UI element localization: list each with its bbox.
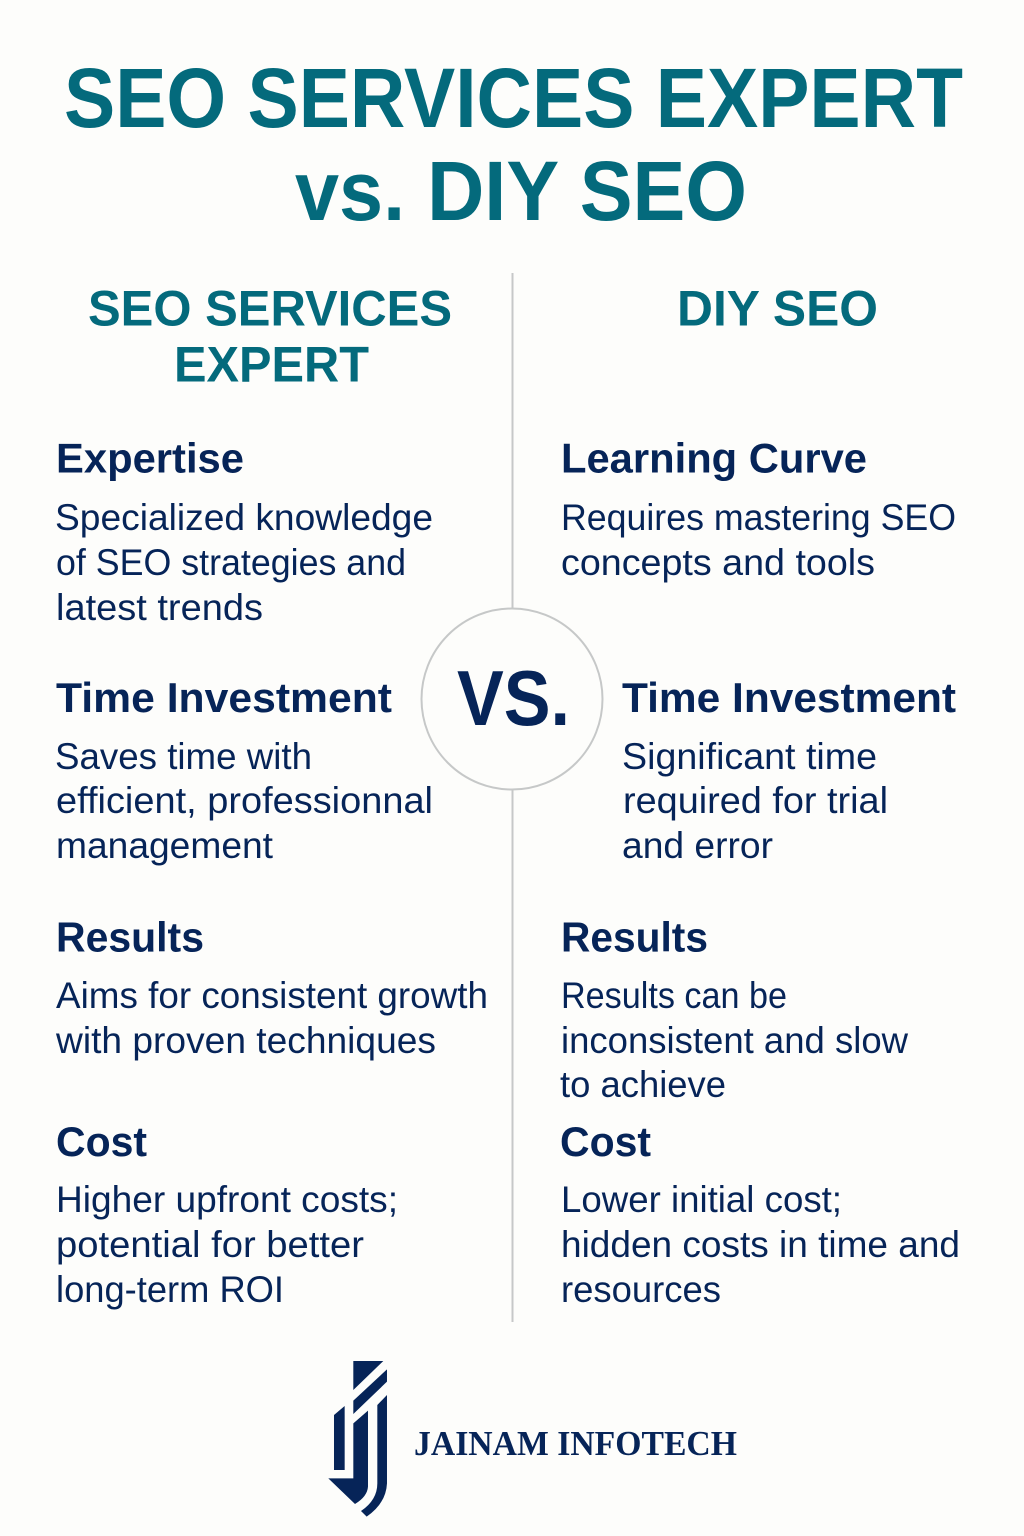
- panel: expert expertise: Specialized knowledge: [55, 497, 433, 538]
- panel: expert cost: potential for better: [56, 1224, 364, 1265]
- icon: JJ monogram: [328, 1361, 387, 1517]
- column heading: SEO services expert: [88, 280, 452, 392]
- panel: DIY results: inconsistent and slow: [561, 1020, 908, 1061]
- column heading: DIY SEO: DIY SEO: [677, 280, 878, 336]
- panel: expert cost: Cost: [56, 1118, 147, 1165]
- title: SEO SERVICES EXPERT: [64, 51, 963, 145]
- panel: expert cost: [56, 1118, 398, 1310]
- center divider line: [512, 273, 514, 1322]
- panel: expert expertise: latest trends: [56, 587, 263, 628]
- panel: expert results: Results: [56, 914, 204, 960]
- panel: expert cost: Higher upfront costs;: [56, 1179, 398, 1220]
- panel: DIY learning curve: [561, 434, 956, 583]
- panel: DIY time investment: Significant time: [622, 736, 877, 777]
- panel: expert expertise: Expertise: [56, 434, 244, 482]
- panel: DIY learning curve: Requires mastering SEO: [561, 497, 956, 538]
- column heading: SEO services expert: EXPERT: [174, 336, 369, 392]
- panel: DIY cost: Cost: [560, 1118, 651, 1165]
- title: [64, 51, 963, 238]
- column heading: SEO services expert: SEO SERVICES: [88, 280, 452, 336]
- VS. badge: [422, 608, 602, 790]
- VS. badge: VS.: [457, 654, 570, 742]
- panel: DIY time investment: required for trial: [623, 780, 888, 821]
- panel: expert expertise: [55, 434, 433, 628]
- panel: expert cost: long-term ROI: [56, 1269, 284, 1310]
- panel: DIY learning curve: Learning Curve: [561, 434, 867, 482]
- panel: expert results: [55, 914, 488, 1061]
- panel: DIY cost: [560, 1118, 960, 1310]
- logo: Jainam Infotech: [328, 1361, 737, 1517]
- panel: DIY cost: resources: [561, 1269, 721, 1310]
- panel: DIY time investment: [622, 674, 956, 866]
- panel: DIY learning curve: concepts and tools: [561, 542, 875, 583]
- panel: expert time investment: efficient, professionnal: [56, 780, 433, 821]
- panel: DIY results: Results can be: [561, 975, 787, 1016]
- panel: expert expertise: of SEO strategies and: [56, 542, 406, 583]
- panel: DIY results: to achieve: [560, 1064, 726, 1105]
- panel: DIY results: [560, 914, 908, 1105]
- company name: JAINAM INFOTECH: [414, 1424, 737, 1463]
- panel: expert time investment: management: [56, 825, 274, 866]
- panel: DIY time investment: Time Investment: [622, 674, 956, 721]
- title: vs. DIY SEO: [295, 144, 747, 238]
- panel: DIY cost: hidden costs in time and: [561, 1224, 960, 1265]
- panel: expert time investment: [55, 674, 433, 866]
- panel: DIY time investment: and error: [622, 825, 773, 866]
- panel: DIY cost: Lower initial cost;: [561, 1179, 842, 1220]
- panel: expert results: Aims for consistent growth: [56, 975, 488, 1016]
- panel: expert time investment: Saves time with: [55, 736, 312, 777]
- panel: expert time investment: Time Investment: [56, 674, 392, 721]
- panel: DIY results: Results: [561, 914, 708, 960]
- panel: expert results: with proven techniques: [55, 1020, 436, 1061]
